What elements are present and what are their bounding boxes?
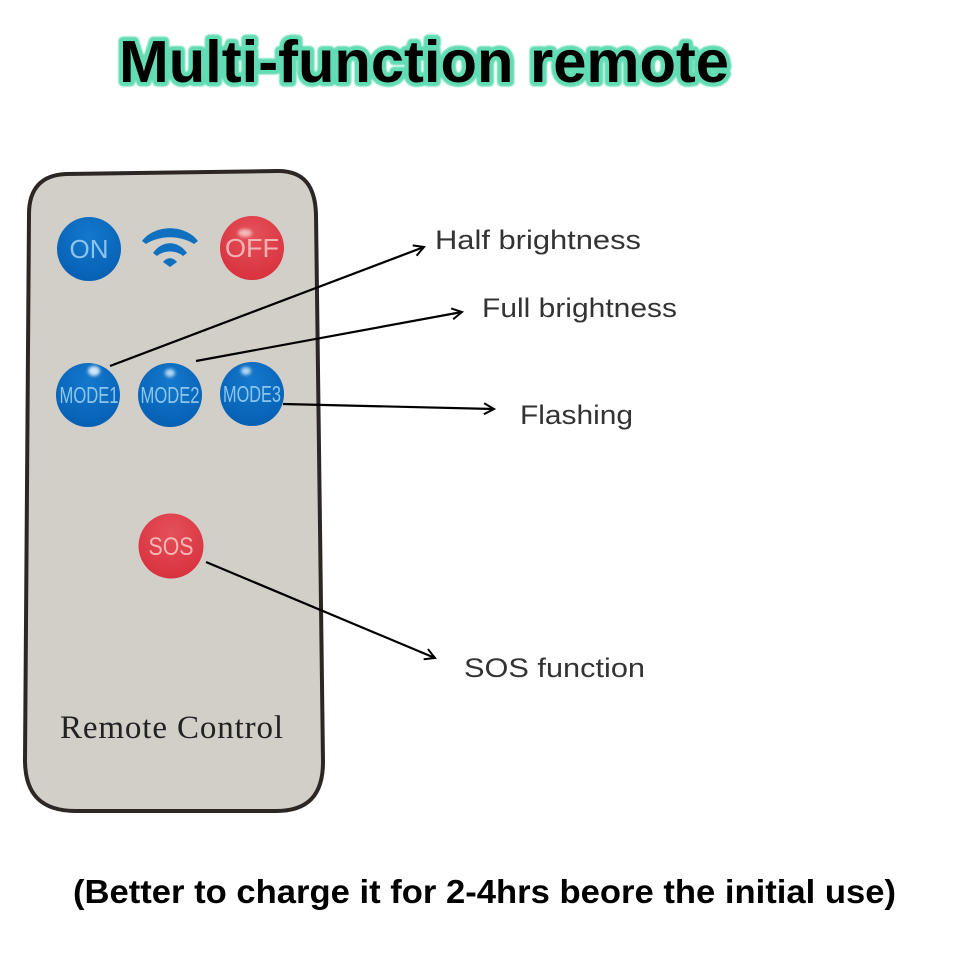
title: Multi-function remote (119, 29, 729, 95)
button: OFF: OFF (225, 233, 279, 263)
button: MODE1: MODE1 (60, 382, 118, 408)
arrow: MODE3 to flashing (283, 404, 494, 409)
label: SOS function: SOS function (464, 653, 645, 683)
button: ON: ON (70, 234, 108, 264)
button: MODE2 (138, 363, 202, 427)
arrow: SOS to SOS function (206, 562, 435, 658)
button: MODE2: MODE2 (140, 382, 200, 408)
button: MODE1 (56, 363, 120, 427)
label: flashing: Flashing (520, 400, 633, 430)
title: Multi-function remote (119, 29, 729, 95)
icon: wifi signal (142, 228, 198, 267)
arrow: MODE2 to full brightness (196, 312, 462, 361)
footer note: (Better to charge it for 2-4hrs beore the initial use) (73, 873, 896, 910)
label: half brightness: Half brightness (435, 225, 641, 255)
button: SOS (138, 514, 204, 578)
remote label: Remote Control (60, 710, 283, 746)
remote control body (25, 171, 323, 811)
arrow: MODE1 to half brightness (110, 247, 424, 366)
button: MODE3: MODE3 (223, 381, 281, 407)
button: MODE3 (220, 362, 284, 426)
button: ON (57, 217, 121, 281)
button: OFF (220, 216, 284, 280)
label: full brightness: Full brightness (482, 293, 677, 323)
button: SOS: SOS (148, 533, 194, 561)
